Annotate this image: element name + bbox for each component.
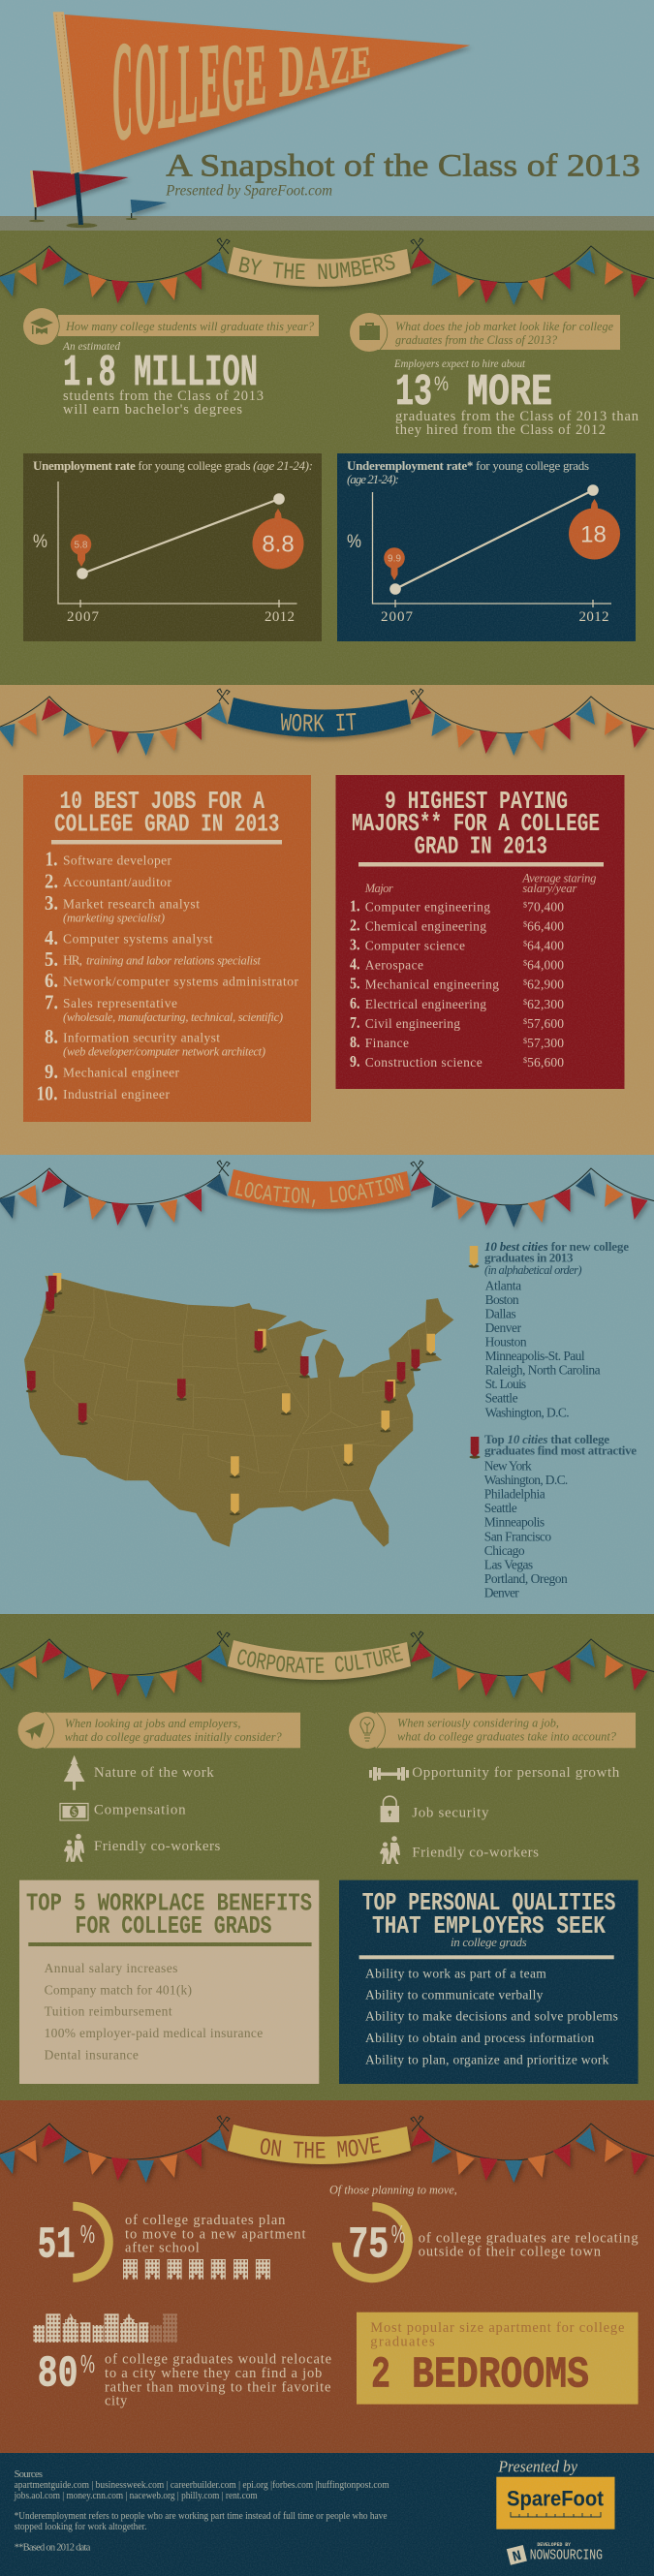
answer: 13% more: %: [434, 373, 449, 395]
job list: Mechanical engineer: [63, 1066, 180, 1080]
majors table: 70,400: [527, 899, 564, 914]
panel: underemployment chart: %: [347, 532, 361, 552]
account considerations list: Opportunity for personal growth: [412, 1765, 620, 1781]
legend: top 10 cities: Denver: [484, 1586, 519, 1600]
section background: by the numbers: [0, 231, 654, 685]
majors table: 7.: [350, 1013, 360, 1032]
presented by line: Presented by SpareFoot.com: [165, 183, 332, 200]
stat: 51 percent: [38, 2206, 305, 2280]
majors table: $: [523, 998, 527, 1007]
job list: Market research analyst: [63, 896, 200, 911]
map pins: best cities: [52, 1273, 436, 1515]
banner: work it: [228, 698, 415, 742]
majors table: $: [523, 900, 527, 909]
icon: tree: [64, 1755, 85, 1790]
job list: HR,: [63, 953, 82, 968]
marker: 5.8: 5.8: [75, 541, 88, 550]
majors table: 5.: [350, 975, 360, 993]
job list: Information security analyst: [63, 1031, 220, 1045]
panel: unemployment chart: 2012: [265, 609, 295, 625]
icon: dollar bill: $: [72, 1808, 77, 1818]
job list: 3.: [45, 891, 58, 915]
question: initially consider: what do college graduates initially consider?: [65, 1729, 282, 1744]
ring chart 51%: [73, 2206, 109, 2278]
job list: 6.: [45, 969, 58, 992]
panel: 10 best jobs: [23, 775, 311, 1122]
big orange pennant with title: [53, 12, 470, 228]
logo: NowSourcing: N: [511, 2548, 523, 2566]
question: graduates this year: How many college students will graduate this year?: [65, 320, 315, 333]
section background: location: [0, 1155, 654, 1614]
benefits list: 100% employer-paid medical insurance: [45, 2026, 263, 2040]
banner: corporate culture: CORPORATE CULTURE: [237, 1645, 403, 1673]
marker: 9.9: [384, 547, 405, 580]
majors table: 8.: [350, 1033, 360, 1051]
panel: unemployment chart: 2007: [67, 609, 99, 625]
job list: (web developer/computer network architect): [63, 1045, 265, 1059]
callout: 2 bedrooms: BEDROOMS: [412, 2350, 589, 2400]
stat: 80 percent: %: [80, 2349, 95, 2378]
answer: 13% more: 13: [395, 368, 432, 418]
benefits list: [45, 1961, 263, 2062]
qualities list: Ability to plan, organize and prioritize work: [365, 2052, 609, 2066]
majors table: 56,600: [527, 1055, 564, 1070]
legend: 10 best cities: Dallas: [485, 1307, 516, 1321]
big orange pennant with title: L: [158, 18, 176, 155]
question: initially consider: [17, 1712, 300, 1749]
legend: 10 best cities: [469, 1239, 629, 1419]
map pins: most attractive cities: [26, 1276, 420, 1425]
initial considerations list: Friendly co-workers: [94, 1839, 220, 1854]
icon: briefcase: [359, 323, 380, 340]
job list: Accountant/auditor: [63, 875, 172, 889]
job list: Sales representative: [63, 996, 177, 1010]
majors table: 9.: [350, 1052, 360, 1071]
legend: top 10 cities: graduates find most attractive: [484, 1443, 637, 1458]
majors table: $: [523, 978, 527, 987]
stat: 75 percent: %: [391, 2219, 405, 2249]
big orange pennant with title: L: [178, 20, 198, 148]
banner: on the move: ON THE MOVE: [260, 2136, 382, 2158]
footer sources and notes: Sources: [15, 2469, 43, 2480]
callout: 2 bedrooms: 2: [371, 2350, 390, 2400]
icon: graduation cap: [30, 318, 53, 334]
answer: 1.8 million: An estimated: [62, 339, 121, 353]
majors table: 3.: [350, 936, 360, 954]
legend: top 10 cities: New York: [484, 1458, 532, 1473]
big orange pennant with title: O: [135, 14, 156, 162]
answer: 1.8 million: 1.8 MILLION: [63, 349, 258, 398]
small red pennant: [29, 171, 129, 222]
banner: by the numbers: BY THE NUMBERS: [238, 254, 395, 279]
job list: 2.: [45, 870, 58, 893]
legend: 10 best cities: Houston: [485, 1335, 527, 1350]
icon: padlock: [381, 1796, 399, 1822]
stat: 51 percent: after school: [125, 2241, 200, 2256]
stat: 75 percent: outside of their college town: [419, 2244, 602, 2259]
majors table: 62,300: [527, 997, 564, 1011]
table header: [364, 872, 596, 895]
qualities list: Ability to communicate verbally: [365, 1988, 544, 2002]
majors table: 64,400: [527, 939, 564, 953]
big orange pennant with title: D: [279, 30, 304, 112]
bunting: work it: [0, 689, 654, 756]
legend: top 10 cities: Portland, Oregon: [484, 1571, 568, 1586]
initial considerations list: Compensation: [94, 1803, 186, 1818]
majors table: 4.: [350, 955, 360, 974]
qualities list: Ability to work as part of a team: [365, 1966, 546, 1980]
stat: 75 percent: [329, 2183, 638, 2279]
section background: corporate culture: [0, 1614, 654, 2100]
big orange pennant with title: C: [112, 13, 133, 171]
ring chart 75%: [336, 2207, 408, 2279]
legend: top 10 cities: Minneapolis: [484, 1515, 545, 1530]
icon: dumbbell: [369, 1767, 409, 1781]
legend: top 10 cities: Seattle: [484, 1501, 517, 1515]
legend: 10 best cities: 10 best cities for new college: [484, 1239, 629, 1254]
logo: SpareFoot: SpareFoot: [507, 2487, 605, 2511]
marker: 18: [569, 499, 620, 560]
qualities list: Ability to make decisions and solve problems: [365, 2009, 618, 2024]
icon: paper plane: [25, 1723, 45, 1741]
panel: underemployment chart: [337, 453, 636, 641]
bunting: on the move: [0, 2116, 654, 2183]
legend: 10 best cities: graduates in 2013: [484, 1251, 574, 1265]
question: take into account: [349, 1712, 636, 1749]
majors table: Computer science: [365, 939, 465, 953]
majors table: $: [523, 1017, 527, 1026]
majors table: Electrical engineering: [365, 997, 486, 1011]
majors table: $: [523, 940, 527, 948]
big orange pennant with title: A: [305, 33, 329, 104]
majors table: 2.: [350, 916, 360, 934]
icon: light bulb: [360, 1718, 374, 1741]
panel: unemployment chart: Unemployment rate for young college grads (age 21-24):: [33, 458, 313, 473]
icon: dollar bill: [60, 1804, 88, 1820]
majors table: [350, 896, 564, 1071]
legend: top 10 cities: Chicago: [484, 1543, 525, 1558]
job list: (marketing specialist): [63, 911, 165, 924]
icon row: apartment buildings: [123, 2259, 270, 2280]
majors table: 66,400: [527, 918, 564, 933]
panel: top personal qualities: [339, 1880, 638, 2084]
majors table: 1.: [350, 896, 360, 915]
legend: 10 best cities: (in alphabetical order): [484, 1263, 581, 1277]
big orange pennant with title: E: [246, 27, 266, 124]
answer: 13% more: Employers expect to hire about: [393, 357, 526, 370]
icon: co-workers: [64, 1834, 84, 1862]
job list: [37, 847, 298, 1104]
stat: 75 percent: 75: [348, 2220, 389, 2270]
big orange pennant with title: E: [351, 37, 371, 88]
legend: top 10 cities: [469, 1432, 637, 1600]
question: job market: graduates from the Class of 2013?: [395, 333, 558, 347]
job list: Computer systems analyst: [63, 931, 213, 946]
panel: top 5 workplace benefits: FOR COLLEGE GRADS: [76, 1911, 271, 1940]
footer sources and notes: apartmentguide.com | businessweek.com | careerbuilder.com | epi.org |forbes.com |huffingtonpost.com: [15, 2480, 389, 2491]
section background: work it: [0, 685, 654, 1155]
stat: 80 percent: 80: [38, 2350, 78, 2400]
panel: underemployment chart: Underemployment rate* for young college grads: [347, 458, 589, 473]
initial considerations list: Nature of the work: [94, 1765, 214, 1781]
footer sources and notes: jobs.aol.com | money.cnn.com | naceweb.org | philly.com | rent.com: [14, 2491, 258, 2501]
small blue pennant: [126, 200, 167, 220]
majors table: Construction science: [365, 1055, 483, 1070]
map of the United States: [24, 1273, 453, 1547]
answer: 13% more: they hired from the Class of 2012: [395, 422, 606, 438]
legend: 10 best cities: Washington, D.C.: [485, 1405, 570, 1419]
stat: 51 percent: to move to a new apartment: [125, 2226, 306, 2242]
stat: 80 percent: of college graduates would relocate: [105, 2352, 331, 2368]
job list: 7.: [45, 990, 58, 1013]
table header: salary/year: [522, 882, 577, 895]
panel: underemployment chart: (age 21-24):: [347, 472, 399, 486]
panel: top personal qualities: THAT EMPLOYERS SEEK: [372, 1911, 606, 1940]
logo: NowSourcing: DEVELOPED BY: [537, 2542, 571, 2548]
callout: 2 bedrooms: [357, 2312, 638, 2405]
logo: NowSourcing: [507, 2542, 603, 2566]
trend line: [395, 490, 593, 589]
legend: top 10 cities: Top 10 cities that college: [484, 1432, 609, 1446]
qualities list: Ability to obtain and process information: [365, 2031, 595, 2045]
logo: NowSourcing: NOWSOURCING: [530, 2548, 603, 2564]
stat: 51 percent: %: [80, 2219, 95, 2249]
majors table: Mechanical engineering: [365, 978, 499, 992]
icon: co-workers: [380, 1836, 400, 1864]
section background: on the move: [0, 2100, 654, 2453]
majors table: 57,600: [527, 1016, 564, 1031]
legend: 10 best cities: St. Louis: [485, 1377, 526, 1391]
job list: 4.: [45, 926, 58, 949]
majors table: 64,000: [527, 958, 564, 973]
trend line: [82, 499, 279, 574]
big orange pennant with title: Z: [330, 36, 350, 95]
banner: work it: WORK IT: [281, 713, 357, 731]
majors table: $: [523, 919, 527, 928]
answer: 1.8 million: will earn bachelor's degrees: [63, 402, 242, 418]
legend: top 10 cities: Washington, D.C.: [484, 1473, 568, 1487]
section background: sky header: [0, 0, 654, 216]
legend: top 10 cities: Las Vegas: [484, 1557, 533, 1571]
job list: training and labor relations specialist: [86, 954, 262, 968]
job list: 10.: [37, 1081, 58, 1104]
subtitle: A Snapshot of the Class of 2013: [166, 149, 640, 184]
legend: 10 best cities: Atlanta: [485, 1279, 521, 1293]
question: job market: [350, 313, 620, 352]
marker: 9.9: 9.9: [388, 554, 401, 564]
job list: Software developer: [63, 853, 172, 868]
job list: 1.: [45, 847, 58, 870]
panel: top personal qualities: in college grads: [451, 1935, 527, 1949]
majors table: Chemical engineering: [365, 918, 486, 933]
account considerations list: Job security: [412, 1805, 489, 1820]
big orange pennant with title: G: [222, 23, 244, 132]
marker: 8.8: [252, 509, 304, 570]
legend: top 10 cities: San Francisco: [484, 1529, 551, 1543]
stat: 80 percent: [33, 2313, 331, 2409]
legend: 10 best cities: Seattle: [485, 1391, 518, 1406]
bunting: by the numbers: [0, 238, 654, 305]
panel: unemployment chart: [23, 453, 322, 641]
legend: 10 best cities: Minneapolis-St. Paul: [485, 1349, 585, 1363]
stat: 75 percent: of college graduates are relocating: [419, 2230, 638, 2246]
majors table: 6.: [350, 994, 360, 1012]
callout: 2 bedrooms: graduates: [370, 2335, 435, 2350]
icon: skyline: [33, 2313, 177, 2343]
question: initially consider: When looking at jobs and employers,: [65, 1716, 240, 1730]
majors table: $: [523, 959, 527, 968]
question: job market: What does the job market look like for college: [395, 320, 613, 333]
panel: 9 highest paying majors: GRAD IN 2013: [415, 832, 547, 861]
stat: 80 percent: rather than moving to their favorite: [105, 2379, 330, 2395]
panel: unemployment chart: %: [33, 532, 47, 552]
initial considerations list: [60, 1755, 220, 1862]
job list: 9.: [45, 1060, 58, 1083]
account considerations list: [369, 1765, 620, 1864]
stat: 75 percent: Of those planning to move,: [329, 2183, 457, 2197]
marker: 18: 18: [580, 521, 607, 548]
job list: 8.: [45, 1025, 58, 1048]
majors table: 57,300: [527, 1036, 564, 1050]
chart axes: [372, 492, 611, 607]
job list: 5.: [45, 947, 58, 971]
big orange pennant with title: E: [200, 22, 221, 140]
benefits list: Annual salary increases: [45, 1961, 177, 1975]
question: take into account: what do college graduates take into account?: [397, 1729, 616, 1744]
stat: 51 percent: of college graduates plan: [125, 2213, 286, 2228]
majors table: $: [523, 1037, 527, 1045]
callout: 2 bedrooms: Most popular size apartment for college: [370, 2320, 624, 2336]
panel: underemployment chart: 2007: [381, 609, 413, 625]
majors table: Aerospace: [365, 958, 423, 973]
legend: top 10 cities: Philadelphia: [484, 1487, 545, 1502]
panel: top 5 workplace benefits: [19, 1880, 319, 2084]
bunting: corporate culture: [0, 1631, 654, 1698]
answer: 13% more: [393, 357, 639, 438]
footer sources and notes: stopped looking for work altogether.: [15, 2522, 146, 2532]
banner: on the move: [228, 2125, 414, 2168]
stat: 80 percent: city: [105, 2394, 128, 2409]
panel: 10 best jobs: COLLEGE GRAD IN 2013: [54, 810, 279, 839]
panel: top 5 workplace benefits: TOP 5 WORKPLACE BENEFITS: [26, 1889, 312, 1918]
bunting: location: [0, 1161, 654, 1227]
job list: Network/computer systems administrator: [63, 975, 298, 989]
logo: SpareFoot: [496, 2477, 614, 2529]
stat: 51 percent: 51: [38, 2220, 76, 2270]
benefits list: Tuition reimbursement: [45, 2004, 172, 2019]
table header: Average staring: [521, 872, 596, 885]
majors table: 62,900: [527, 978, 564, 992]
majors table: Civil engineering: [365, 1016, 460, 1031]
legend: 10 best cities: Denver: [485, 1320, 522, 1335]
majors table: Computer engineering: [365, 899, 490, 914]
panel: 10 best jobs: 10 BEST JOBS FOR A: [60, 787, 265, 816]
job list: Industrial engineer: [63, 1087, 171, 1102]
marker: 8.8: 8.8: [262, 531, 295, 558]
stat: 80 percent: to a city where they can find a job: [105, 2366, 322, 2381]
benefits list: Company match for 401(k): [45, 1982, 192, 1997]
presented by: Presented by: [497, 2458, 577, 2476]
panel: underemployment chart: 2012: [579, 609, 608, 625]
section background: grey ground strip: [0, 216, 654, 231]
footer sources and notes: *Underemployment refers to people who are working part time instead of full time or people who have: [15, 2511, 388, 2522]
panel: 9 highest paying majors: [335, 775, 624, 1089]
banner: location: LOCATION, LOCATION: [234, 1175, 404, 1207]
section background: footer: [0, 2453, 654, 2576]
answer: 13% more: graduates from the Class of 2013 than: [395, 409, 639, 424]
footer sources and notes: **Based on 2012 data: [15, 2543, 91, 2554]
table header: Major: [364, 882, 393, 895]
majors table: Finance: [365, 1036, 409, 1050]
answer: 1.8 million: students from the Class of 2013: [63, 388, 264, 404]
answer: 13% more: MORE: [467, 368, 552, 418]
legend: 10 best cities: Raleigh, North Carolina: [485, 1363, 601, 1378]
question: graduates this year: [23, 308, 319, 345]
qualities list: [365, 1966, 618, 2066]
panel: 9 highest paying majors: 9 HIGHEST PAYING: [385, 787, 568, 816]
majors table: $: [523, 1056, 527, 1065]
marker: 5.8: [71, 534, 91, 567]
account considerations list: Friendly co-workers: [412, 1845, 539, 1860]
legend: 10 best cities: Boston: [485, 1292, 519, 1307]
question: take into account: When seriously considering a job,: [397, 1716, 559, 1730]
chart axes: [58, 481, 296, 607]
footer sources and notes: [14, 2469, 389, 2554]
benefits list: Dental insurance: [45, 2047, 139, 2062]
job list: (wholesale, manufacturing, technical, scientific): [63, 1010, 283, 1024]
answer: 1.8 million: [62, 339, 264, 418]
